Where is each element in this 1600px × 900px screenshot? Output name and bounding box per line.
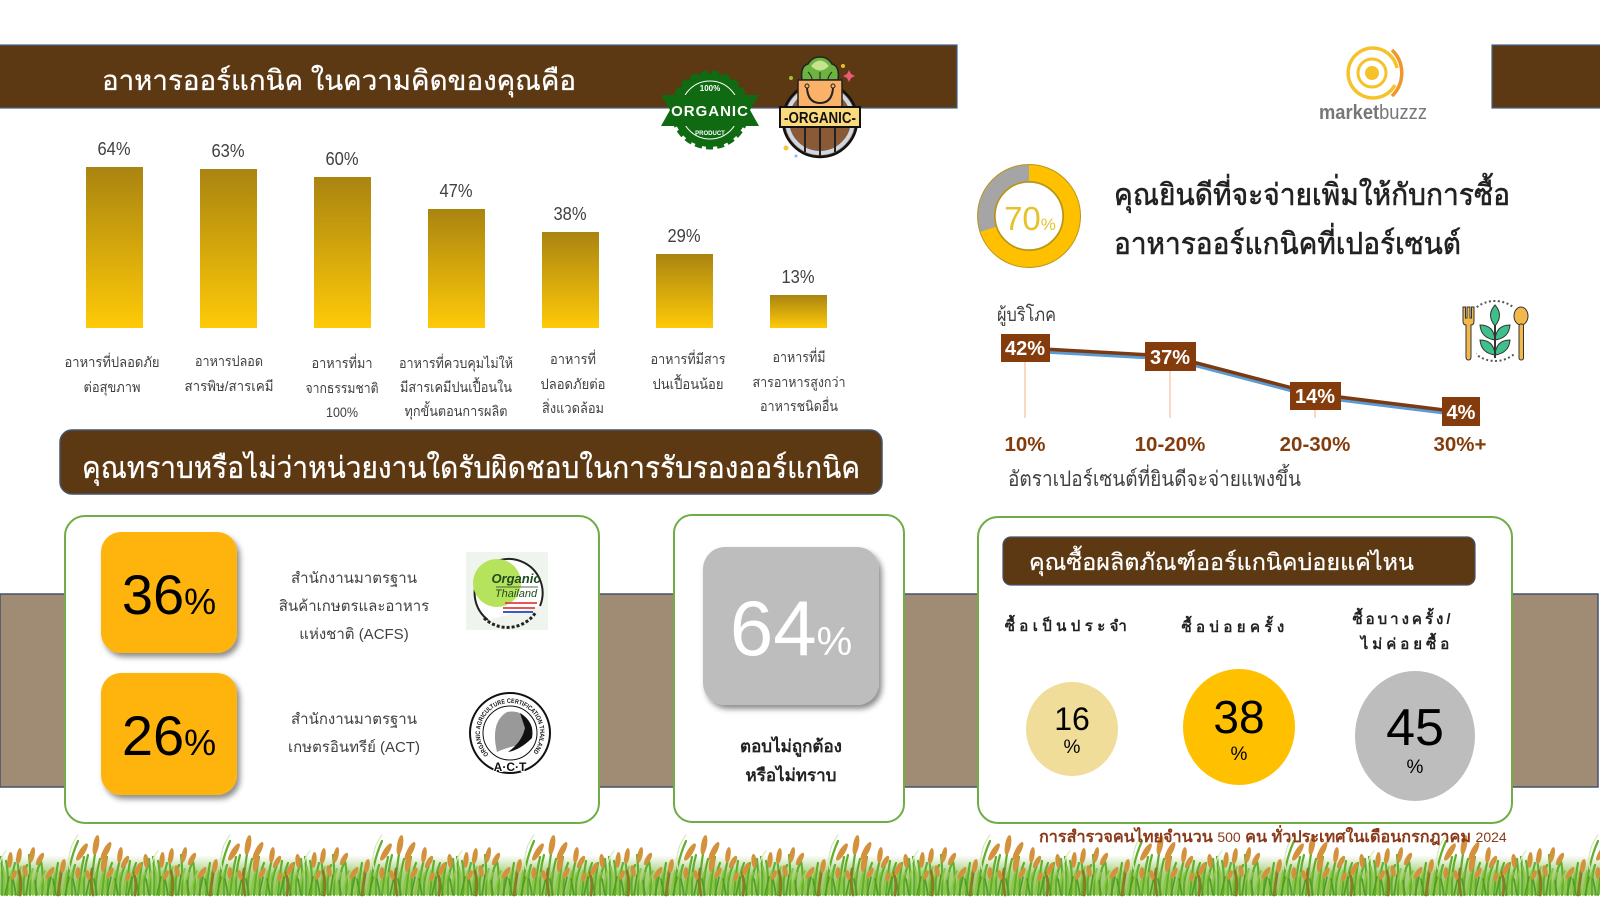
icon: ACT logo <box>469 692 551 774</box>
text: wrong or unknown: ตอบไม่ถูกต้อง <box>740 736 842 758</box>
bar labels: อาหารที่มีสาร <box>650 350 726 367</box>
icon: organic green badge: 100% <box>700 84 720 93</box>
icon: marketbuzzz logo: marketbuzzz <box>1319 102 1427 124</box>
grass strip <box>0 833 1600 897</box>
bar labels: อาหารที่ <box>550 350 596 367</box>
bar chart: organic perception: 64% <box>98 139 130 159</box>
line chart: premium percentage: 14% <box>1295 386 1335 408</box>
heading: willingness to pay more <box>1114 173 1510 261</box>
donut: 70%: 70% <box>1004 200 1056 237</box>
stat: 26% <box>101 673 237 795</box>
stat: 26%: 26% <box>122 704 216 767</box>
circle: 45% <box>1355 671 1475 801</box>
title: organic food in your opinion: อาหารออร์แกนิค ในความคิดของคุณคือ <box>102 64 576 98</box>
line chart: premium percentage: 30%+ <box>1433 433 1487 456</box>
circle: 38%: 38 <box>1213 691 1265 743</box>
icon: ACT logo: A·C·T <box>494 760 527 774</box>
stat: 36%: 36% <box>122 563 216 626</box>
bar chart: organic perception: 13% <box>782 267 814 287</box>
header band: left brown <box>0 45 957 108</box>
panel: purchase frequency <box>978 517 1512 823</box>
line chart: premium percentage: 37% <box>1150 347 1190 369</box>
text: wrong or unknown: หรือไม่ทราบ <box>746 765 836 785</box>
text: ACT: สำนักงานมาตรฐาน <box>291 711 417 728</box>
line chart: premium percentage: 42% <box>1005 338 1045 360</box>
circle: 16%: 16 <box>1054 701 1090 737</box>
heading bar: responsible agency: คุณทราบหรือไม่ว่าหน่วยงานใดรับผิดชอบในการรับรองออร์แกนิค <box>82 450 860 487</box>
line chart: premium percentage: ผู้บริโภค <box>997 303 1056 326</box>
bar labels: อาหารชนิดอื่น <box>760 397 838 414</box>
icon: organic green badge <box>661 73 759 147</box>
bar chart: organic perception <box>86 139 827 328</box>
line chart: premium percentage: 20-30% <box>1280 433 1350 456</box>
bar labels: อาหารปลอด <box>195 353 263 369</box>
text: wrong or unknown <box>740 736 842 785</box>
heading bar: responsible agency <box>60 430 882 494</box>
bar chart: organic perception: 38% <box>554 204 586 224</box>
labels: frequency: ซื้อบ่อยครั้ง <box>1181 615 1289 636</box>
icon: Organic Thailand logo: Thailand <box>495 588 538 600</box>
icon: fork, plant, spoon <box>1462 301 1528 362</box>
heading: willingness to pay more: คุณยินดีที่จะจ่ายเพิ่มให้กับการซื้อ <box>1114 173 1510 214</box>
panel: incorrect answers <box>674 515 904 822</box>
line chart: premium percentage: อัตราเปอร์เซนต์ที่ยินดีจะจ่ายแพงขึ้น <box>1008 464 1301 491</box>
icon: Organic Thailand logo: Organic <box>491 571 541 586</box>
labels: frequency: ซื้อบางครั้ง/ <box>1352 607 1454 628</box>
icon: organic green badge: PRODUCT <box>695 131 725 137</box>
text: ACFS <box>279 570 429 643</box>
bar labels: อาหารที่มี <box>772 348 826 365</box>
bar labels: มีสารเคมีปนเปื้อนใน <box>400 377 512 395</box>
stat: 64% <box>703 547 879 705</box>
footnote: survey source: การสำรวจคนไทยจำนวน 500 คน ทั่วประเทศในเดือนกรกฎาคม 2024 <box>1039 824 1507 846</box>
heading: how often: คุณซื้อผลิตภัณฑ์ออร์แกนิคบ่อยแค่ไหน <box>1029 546 1414 576</box>
circle: 16% <box>1026 682 1118 776</box>
circle: 38% <box>1183 669 1295 785</box>
background band: lower tan <box>0 594 1598 787</box>
icon: organic basket <box>780 57 860 158</box>
bar labels: จากธรรมชาติ <box>306 380 378 396</box>
line chart: premium percentage <box>997 303 1487 491</box>
bar labels: ทุกขั้นตอนการผลิต <box>404 401 508 420</box>
bar labels: อาหารที่ปลอดภัย <box>64 353 160 370</box>
icon: organic green badge: ORGANIC <box>671 103 749 120</box>
bar chart: organic perception: 29% <box>668 226 700 246</box>
line chart: premium percentage: 10-20% <box>1135 433 1205 456</box>
text: ACFS: สำนักงานมาตรฐาน <box>291 570 417 587</box>
bar chart: organic perception: 47% <box>440 181 472 201</box>
line chart: premium percentage: 10% <box>1004 433 1046 456</box>
circle: 38%: % <box>1231 744 1248 765</box>
bar labels: 100% <box>326 404 358 420</box>
panel: certification agencies <box>64 515 600 824</box>
labels: frequency: ไม่ค่อยซื้อ <box>1359 632 1453 653</box>
icon: marketbuzzz logo <box>1319 48 1427 124</box>
bar chart: organic perception: 63% <box>212 141 244 161</box>
bar labels <box>64 348 846 420</box>
heading: willingness to pay more: อาหารออร์แกนิคที่เปอร์เซนต์ <box>1114 223 1461 261</box>
icon: Organic Thailand logo <box>466 552 548 630</box>
bar labels: ปนเปื้อนน้อย <box>652 374 724 392</box>
header band: right brown <box>1492 45 1600 108</box>
bar labels: สารอาหารสูงกว่า <box>752 374 846 391</box>
bar labels: อาหารที่มา <box>312 354 372 371</box>
line chart: premium percentage: 4% <box>1447 402 1476 424</box>
bar labels: อาหารที่ควบคุมไม่ให้ <box>399 354 513 372</box>
stat: 64%: 64% <box>730 584 852 672</box>
stat: 36% <box>101 532 237 653</box>
heading: how often <box>1003 537 1475 585</box>
text: ACT: เกษตรอินทรีย์ (ACT) <box>288 739 420 756</box>
text: ACT <box>288 711 420 756</box>
bar labels: ต่อสุขภาพ <box>84 379 140 396</box>
donut: 70% <box>986 173 1072 259</box>
icon: ACT logo: ORGANIC AGRICULTURE CERTIFICATION THAILAND <box>476 698 545 756</box>
bar labels: สารพิษ/สารเคมี <box>184 378 274 394</box>
circle: 45%: % <box>1407 757 1424 778</box>
circle: 16%: % <box>1064 737 1081 758</box>
labels: frequency: ซื้อเป็นประจำ <box>1005 614 1131 635</box>
icon: organic basket: -ORGANIC- <box>784 110 856 127</box>
text: ACFS: แห่งชาติ (ACFS) <box>299 626 409 643</box>
bar labels: ปลอดภัยต่อ <box>540 376 606 392</box>
bar labels: สิ่งแวดล้อม <box>542 399 604 416</box>
text: ACFS: สินค้าเกษตรและอาหาร <box>279 598 429 615</box>
labels: frequency <box>1005 607 1454 653</box>
bar chart: organic perception: 60% <box>326 149 358 169</box>
circle: 45%: 45 <box>1386 699 1444 757</box>
